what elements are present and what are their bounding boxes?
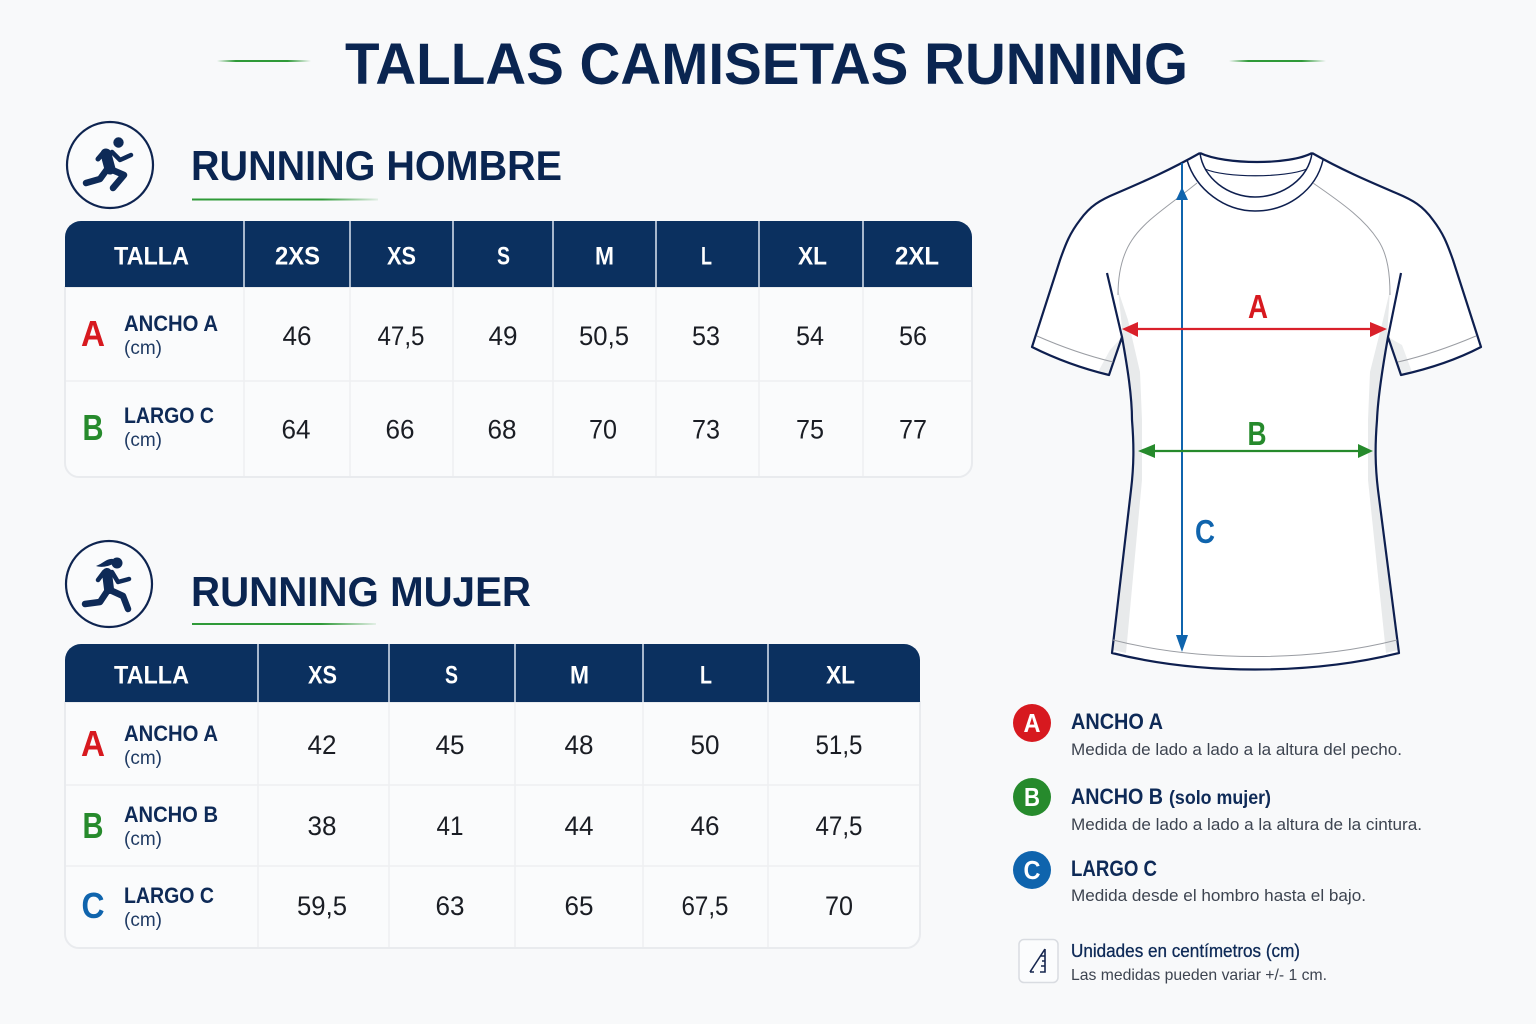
row: largo C hombre: 75 — [796, 414, 824, 444]
row: largo C hombre: 68 — [488, 414, 516, 444]
heading: running hombre: RUNNING HOMBRE — [191, 142, 562, 189]
arrow B: waist: B — [1248, 415, 1266, 452]
row: largo C hombre: 77 — [899, 414, 927, 444]
heading: running mujer: RUNNING MUJER — [191, 568, 531, 615]
icon: ruler — [1019, 940, 1058, 982]
legend item A: ANCHO A — [1071, 709, 1163, 734]
row: ancho A hombre: 46 — [282, 321, 312, 351]
table header: hombre: 2XL — [895, 242, 939, 270]
arrow B: waist — [1138, 415, 1373, 458]
row: ancho A hombre: 54 — [796, 321, 824, 351]
note: units: Unidades en centímetros (cm) — [1071, 941, 1300, 961]
legend item C: Medida desde el hombro hasta el bajo. — [1071, 886, 1366, 905]
row: ancho A mujer: 45 — [436, 730, 464, 760]
row: largo C mujer: 67,5 — [682, 891, 728, 921]
row: ancho B mujer: 44 — [564, 811, 594, 841]
arrow A: chest: A — [1248, 288, 1268, 325]
row: ancho A hombre: 50,5 — [579, 321, 629, 351]
row: ancho B mujer: 46 — [690, 811, 720, 841]
table header: hombre: L — [701, 242, 712, 270]
row: ancho A mujer: 48 — [564, 730, 594, 760]
note: units: Las medidas pueden variar +/- 1 cm. — [1071, 967, 1327, 984]
icon: female runner — [66, 541, 152, 627]
row: ancho B mujer — [82, 802, 862, 850]
legend item A: Medida de lado a lado a la altura del pecho. — [1071, 740, 1402, 759]
row: ancho A mujer: A — [81, 723, 105, 764]
row: ancho A hombre: ANCHO A — [124, 311, 218, 336]
legend item B — [1013, 778, 1422, 834]
row: largo C hombre: 64 — [282, 414, 310, 444]
legend item A — [1013, 704, 1402, 759]
legend item C — [1013, 851, 1366, 905]
table: hombre — [65, 221, 972, 477]
collar — [1187, 153, 1323, 211]
legend item B: ANCHO B — [1071, 784, 1163, 809]
legend item B: (solo mujer) — [1169, 788, 1271, 809]
table header: hombre: XL — [798, 242, 827, 270]
row: largo C mujer: 65 — [564, 891, 594, 921]
table header: hombre — [65, 221, 972, 287]
title: TALLAS CAMISETAS RUNNING — [345, 32, 1188, 97]
arrow A: chest — [1122, 288, 1387, 337]
table header: hombre: TALLA — [114, 242, 189, 270]
row: ancho A mujer: 42 — [308, 730, 336, 760]
legend — [1013, 704, 1422, 905]
row: largo C hombre: 73 — [692, 414, 720, 444]
row: largo C hombre: B — [82, 407, 104, 448]
row: largo C hombre: LARGO C — [124, 403, 214, 428]
row: ancho A mujer: 50 — [690, 730, 720, 760]
legend item C: LARGO C — [1071, 856, 1157, 881]
row: ancho B mujer: 41 — [436, 811, 464, 841]
icon: male runner — [67, 122, 153, 208]
t-shirt diagram — [1032, 153, 1481, 670]
table header: mujer: XS — [308, 662, 337, 690]
shirt outline — [1032, 153, 1481, 670]
note: units — [1071, 941, 1327, 984]
row: ancho B mujer: (cm) — [124, 829, 162, 850]
arrow C: length — [1176, 163, 1215, 652]
row: largo C mujer: (cm) — [124, 910, 162, 931]
row: ancho A hombre: 47,5 — [378, 321, 424, 351]
row: ancho A hombre: 49 — [488, 321, 518, 351]
row: ancho A mujer: (cm) — [124, 748, 162, 769]
seams — [1037, 183, 1476, 656]
table header: mujer: S — [445, 662, 458, 690]
row: ancho B mujer: 38 — [308, 811, 336, 841]
table: mujer — [65, 644, 920, 948]
row: largo C mujer: 70 — [825, 891, 853, 921]
row: ancho A hombre — [81, 311, 927, 359]
row: ancho A hombre: 56 — [899, 321, 927, 351]
table header: mujer: M — [570, 662, 589, 690]
row: largo C hombre: 70 — [589, 414, 617, 444]
row: ancho A hombre: 53 — [692, 321, 720, 351]
row: ancho A hombre: A — [81, 313, 105, 354]
row: largo C mujer: 63 — [436, 891, 464, 921]
row: largo C mujer: 59,5 — [297, 891, 347, 921]
row: ancho B mujer: 47,5 — [816, 811, 862, 841]
legend item B: Medida de lado a lado a la altura de la cintura. — [1071, 815, 1422, 834]
row: ancho A mujer: 51,5 — [816, 730, 862, 760]
row: largo C mujer — [82, 883, 853, 931]
row: largo C hombre: 66 — [386, 414, 414, 444]
row: largo C mujer: LARGO C — [124, 883, 214, 908]
row: largo C hombre — [82, 403, 927, 451]
table header: hombre: M — [595, 242, 614, 270]
table header: hombre: 2XS — [275, 242, 320, 270]
row: largo C hombre: (cm) — [124, 430, 162, 451]
legend item A: A — [1024, 708, 1041, 738]
row: ancho A mujer — [81, 721, 862, 769]
table header: mujer — [65, 644, 920, 702]
row: largo C mujer: C — [82, 885, 104, 926]
table header: hombre: S — [497, 242, 510, 270]
row: ancho B mujer: B — [82, 805, 104, 846]
table header: mujer: TALLA — [114, 662, 189, 690]
table header: hombre: XS — [387, 242, 416, 270]
legend item B: B — [1024, 782, 1040, 812]
legend item C: C — [1024, 855, 1041, 885]
table header: mujer: L — [700, 662, 712, 690]
row: ancho A mujer: ANCHO A — [124, 721, 218, 746]
table header: mujer: XL — [826, 662, 855, 690]
row: ancho B mujer: ANCHO B — [124, 802, 218, 827]
row: ancho A hombre: (cm) — [124, 338, 162, 359]
arrow C: length: C — [1195, 513, 1215, 550]
